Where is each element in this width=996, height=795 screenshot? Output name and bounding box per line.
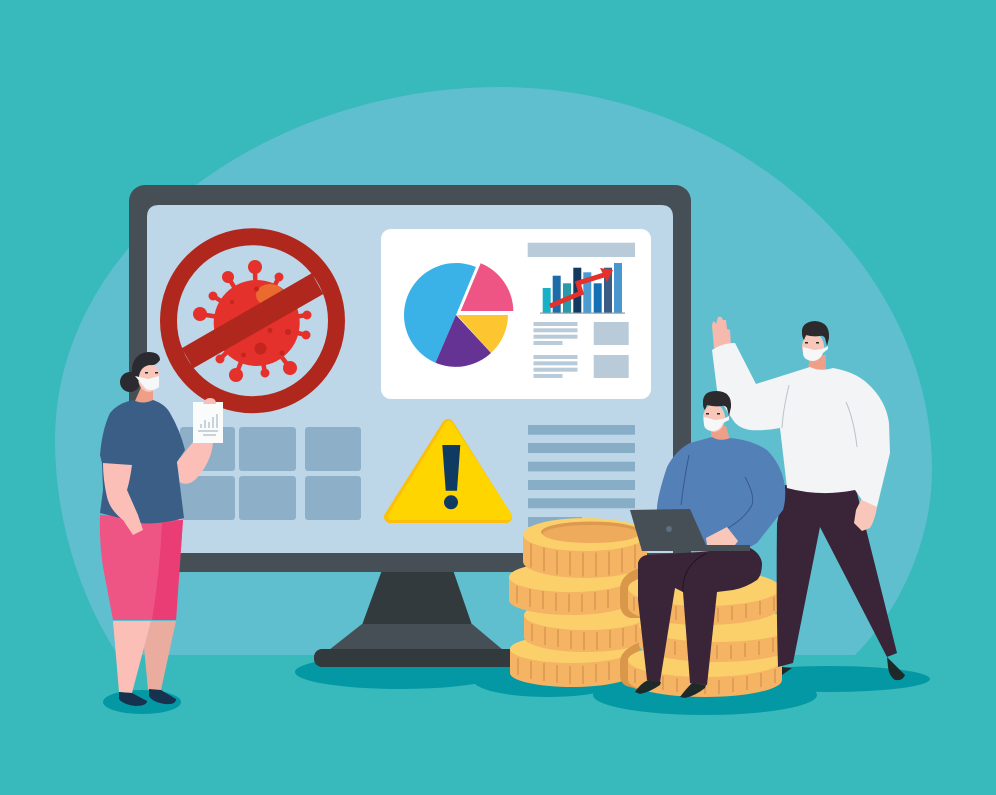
- hands: [706, 527, 738, 545]
- white card: [381, 229, 651, 399]
- top: [100, 400, 185, 523]
- text lines and thumbnails: [534, 322, 629, 378]
- right arm: [177, 442, 213, 484]
- neck: [808, 355, 826, 373]
- man sitting: [630, 391, 785, 698]
- no virus sign: [168, 237, 336, 405]
- sweater: [657, 437, 785, 547]
- monitor base slope: [329, 624, 503, 650]
- bar chart: [540, 263, 625, 314]
- mask: [704, 416, 729, 431]
- screen text lines: [528, 425, 635, 527]
- pie chart: [404, 263, 513, 367]
- right coin stack: [628, 570, 795, 697]
- head: [138, 364, 160, 392]
- back leg: [144, 621, 176, 690]
- man standing: [712, 317, 905, 680]
- skirt: [100, 515, 183, 620]
- hand on hip: [854, 498, 877, 531]
- woman: [100, 352, 223, 714]
- background blob: [55, 87, 932, 655]
- tile grid: [180, 427, 361, 520]
- warning triangle: [390, 425, 508, 517]
- pants: [777, 485, 897, 667]
- virus: [193, 260, 312, 382]
- prohibition bar: [182, 273, 323, 368]
- eyes: [145, 372, 158, 374]
- shoes: [119, 689, 176, 706]
- monitor screen: [147, 205, 673, 553]
- chart header: [528, 243, 635, 257]
- monitor stand: [362, 570, 472, 625]
- head: [703, 404, 725, 432]
- eyes: [805, 342, 819, 344]
- exclamation mark: [442, 445, 460, 491]
- bun: [120, 372, 140, 392]
- sweater: [712, 343, 890, 507]
- hand on paper: [203, 398, 216, 404]
- legs: [638, 547, 762, 685]
- hair: [132, 352, 160, 388]
- mask: [803, 346, 828, 361]
- prohibition ring: [168, 237, 336, 405]
- ground shadows: [295, 655, 930, 715]
- coin recess: [541, 522, 641, 542]
- monitor: [129, 185, 691, 667]
- woman's shadow: [103, 690, 181, 714]
- hair: [703, 391, 731, 416]
- shoes: [782, 657, 905, 680]
- report panel: [381, 229, 651, 399]
- laptop: [630, 509, 750, 551]
- raised hand: [712, 317, 731, 348]
- left coin stack: [509, 518, 648, 687]
- monitor frame: [129, 185, 691, 572]
- eyes: [706, 413, 720, 414]
- monitor base foot: [314, 649, 524, 667]
- coin cast shadows: [620, 568, 640, 690]
- head: [802, 333, 824, 361]
- front leg: [113, 621, 151, 693]
- left arm: [103, 463, 143, 535]
- neck: [135, 385, 153, 404]
- virus spots: [230, 286, 291, 358]
- mask: [135, 376, 159, 390]
- paper: [193, 402, 223, 443]
- trend arrow: [550, 268, 613, 306]
- virus highlight: [256, 284, 284, 306]
- hair: [802, 321, 829, 346]
- neck: [711, 426, 730, 443]
- shoes: [635, 680, 706, 698]
